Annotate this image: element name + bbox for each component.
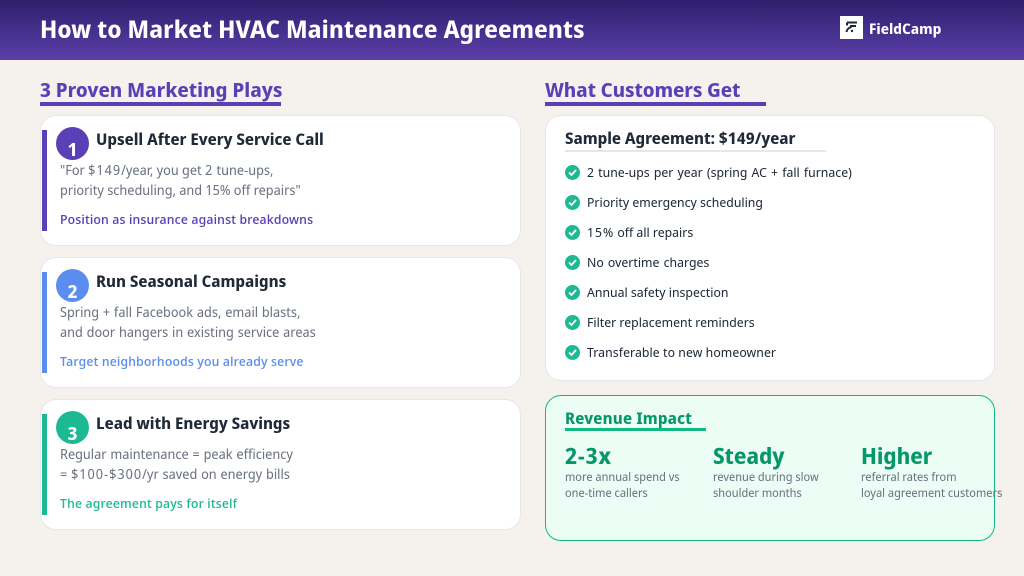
panel: play 1	[40, 115, 521, 246]
panel: revenue impact	[545, 395, 995, 541]
panel: play 2	[40, 257, 521, 388]
stat 3: referral rates from	[861, 469, 956, 485]
stat 1: 2-3x	[565, 441, 612, 471]
play description: priority scheduling, and 15% off repairs"	[60, 181, 301, 199]
panel: play 3	[40, 399, 521, 530]
benefit 5: Annual safety inspection	[587, 283, 728, 301]
benefit 7: Transferable to new homeowner	[587, 343, 776, 361]
benefit 4: No overtime charges	[587, 253, 709, 271]
title: How to Market HVAC Maintenance Agreements	[40, 13, 585, 46]
logo: FieldCamp	[840, 16, 941, 39]
stat 2: Steady	[713, 441, 784, 471]
stat 1: more annual spend vs	[565, 469, 680, 485]
heading: marketing plays: 3 Proven Marketing Plays	[40, 76, 282, 103]
play description	[60, 445, 293, 483]
play takeaway: Target neighborhoods you already serve	[60, 352, 304, 370]
play description: Regular maintenance = peak efficiency	[60, 445, 293, 463]
benefit 3: 15% off all repairs	[587, 223, 693, 241]
play title: Run Seasonal Campaigns	[96, 270, 286, 292]
play description	[60, 303, 316, 341]
number badge 3: 3	[68, 422, 77, 446]
accent bar	[42, 272, 47, 373]
stat 3: Higher	[861, 441, 932, 471]
play title: Lead with Energy Savings	[96, 412, 290, 434]
benefit 2: Priority emergency scheduling	[587, 193, 763, 211]
accent bar	[42, 414, 47, 515]
icon: FieldCamp mark	[840, 16, 863, 39]
revenue heading: Revenue Impact	[565, 407, 692, 429]
benefit 6: Filter replacement reminders	[587, 313, 755, 331]
stat 2	[713, 441, 819, 501]
play description: = $100-$300/yr saved on energy bills	[60, 465, 290, 483]
panel: sample agreement	[545, 115, 995, 381]
stat 1	[565, 441, 680, 501]
stat 2: shoulder months	[713, 485, 802, 501]
benefit 1: 2 tune-ups per year (spring AC + fall furnace)	[587, 163, 852, 181]
play takeaway: The agreement pays for itself	[60, 494, 237, 512]
stat 1: one-time callers	[565, 485, 648, 501]
play description: Spring + fall Facebook ads, email blasts,	[60, 303, 300, 321]
header banner	[0, 0, 1024, 60]
play takeaway: Position as insurance against breakdowns	[60, 210, 313, 228]
benefits list	[565, 163, 852, 361]
number badge 2: 2	[68, 280, 77, 304]
logo wordmark: FieldCamp	[869, 19, 941, 39]
play description: and door hangers in existing service areas	[60, 323, 316, 341]
stat 3: loyal agreement customers	[861, 485, 1002, 501]
number badge 2	[56, 269, 89, 302]
heading: customers get: What Customers Get	[545, 76, 740, 103]
stat 2: revenue during slow	[713, 469, 819, 485]
play description	[60, 161, 301, 199]
accent bar	[42, 130, 47, 231]
number badge 1: 1	[68, 138, 77, 162]
stat 3	[861, 441, 1002, 501]
play title: Upsell After Every Service Call	[96, 128, 324, 150]
number badge 1	[56, 127, 89, 160]
agreement heading: Sample Agreement: $149/year	[565, 127, 795, 149]
play description: "For $149/year, you get 2 tune-ups,	[60, 161, 273, 179]
number badge 3	[56, 411, 89, 444]
